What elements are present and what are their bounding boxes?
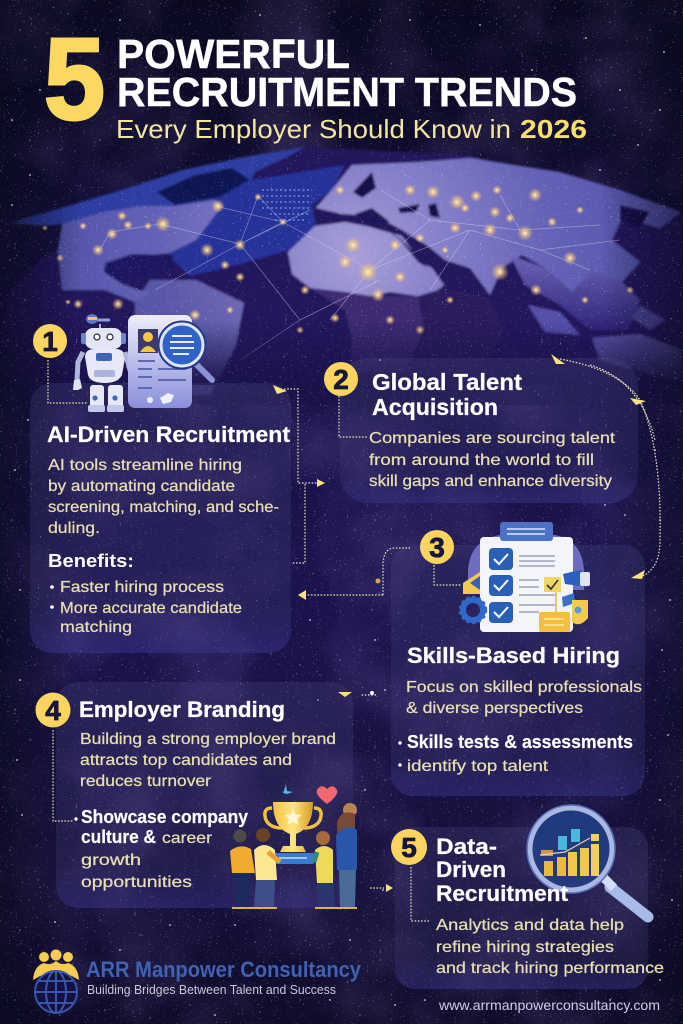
showcase list: career (162, 830, 213, 847)
showcase list: culture & (81, 827, 156, 847)
showcase list: growth (81, 852, 141, 869)
atlantic dotted glow (262, 190, 312, 220)
heading 3: Skills-Based Hiring (407, 643, 620, 668)
description 2 (369, 430, 616, 490)
title (44, 14, 587, 144)
description 3 (406, 679, 642, 717)
icon: magnifier with chart (527, 805, 648, 917)
heading 2: Global Talent (372, 369, 522, 395)
icon: robot (73, 314, 134, 412)
connector 3 (434, 565, 462, 585)
skills list: Skills tests & assessments (407, 732, 633, 752)
badge 2 (324, 362, 358, 396)
card 5 (395, 827, 648, 989)
lower map fade (0, 320, 683, 385)
description 1: AI tools streamline hiring (48, 457, 242, 474)
badge 3 (420, 530, 454, 564)
headline line 1: POWERFUL (117, 31, 350, 77)
description 1: by automating candidate (48, 478, 235, 495)
benefits list: More accurate candidate (60, 600, 242, 617)
description 5 (436, 917, 664, 977)
description 5: and track hiring performance (436, 960, 664, 977)
panel 1: AI-Driven Recruitment (30, 314, 291, 653)
description 3: Focus on skilled professionals (406, 679, 642, 696)
showcase list: Showcase company (81, 807, 248, 827)
connector 4 (53, 730, 73, 821)
description 3: & diverse perspectives (406, 700, 583, 717)
description 4: reduces turnover (80, 773, 212, 790)
badge 4 (36, 692, 70, 728)
heading 5 (436, 834, 569, 906)
description 5: Analytics and data help (436, 917, 624, 934)
benefits list (50, 579, 242, 636)
description 1: duling. (48, 520, 100, 537)
description 4 (80, 731, 336, 790)
icon: resume and magnifier (128, 315, 212, 408)
description 2: from around the world to fill (369, 452, 594, 469)
heading 5: Driven (436, 857, 506, 882)
connector 2 (339, 396, 367, 437)
showcase list (74, 807, 248, 891)
icon: clipboard checklist (460, 522, 590, 632)
flow arrows (273, 354, 660, 892)
badge 3: 3 (429, 532, 445, 563)
badge 1 (33, 324, 67, 358)
showcase list: opportunities (81, 874, 192, 891)
network lines (100, 190, 620, 360)
badge 4: 4 (45, 695, 61, 726)
connector 5 (411, 867, 430, 921)
skills list: identify top talent (407, 758, 549, 775)
description 1: screening, matching, and sche- (48, 499, 279, 516)
card 3 (391, 545, 645, 796)
headline line 2: RECRUITMENT TRENDS (117, 69, 577, 115)
description 4: attracts top candidates and (80, 752, 292, 769)
subtitle: Every Employer Should Know in (116, 114, 511, 144)
subtitle year: 2026 (520, 114, 587, 144)
description 1 (48, 457, 279, 537)
card 2 (340, 358, 638, 503)
card 1 (30, 383, 291, 653)
website url: www.arrmanpowerconsultancy.com (438, 997, 660, 1013)
card 4 (56, 682, 353, 908)
heading 2: Acquisition (372, 394, 498, 420)
heading 5: Recruitment (436, 881, 569, 906)
heading 4: Employer Branding (79, 697, 285, 722)
badge 5: 5 (401, 832, 417, 863)
description 2: Companies are sourcing talent (369, 430, 616, 447)
benefits list: Faster hiring process (60, 579, 224, 596)
tagline: Building Bridges Between Talent and Success (87, 983, 336, 997)
heading 1: AI-Driven Recruitment (47, 422, 291, 447)
connector 1 (48, 360, 88, 403)
badge 5 (391, 829, 427, 865)
icon: globe (35, 971, 77, 1013)
company name: ARR Manpower Consultancy (86, 957, 362, 982)
benefits heading: Benefits: (48, 551, 134, 571)
heading 2 (372, 369, 522, 420)
panel 2: Global Talent Acquisition (324, 358, 638, 503)
skills list (398, 732, 633, 775)
benefits list: matching (60, 619, 132, 636)
description 4: Building a strong employer brand (80, 731, 336, 748)
icon: team with trophy (230, 785, 357, 908)
footer logo (33, 950, 362, 1013)
icon: people (33, 950, 79, 980)
description 5: refine hiring strategies (436, 939, 614, 956)
panel 5: Data-Driven Recruitment (391, 805, 664, 989)
description 2: skill gaps and enhance diversity (369, 473, 612, 490)
big number 5: 5 (44, 14, 105, 144)
world map (0, 147, 683, 395)
panel 4: Employer Branding (36, 682, 357, 908)
badge 2: 2 (333, 364, 349, 395)
panel 3: Skills-Based Hiring (391, 522, 645, 796)
badge 1: 1 (42, 326, 58, 357)
heading 5: Data- (436, 834, 497, 859)
city lights (42, 184, 634, 335)
